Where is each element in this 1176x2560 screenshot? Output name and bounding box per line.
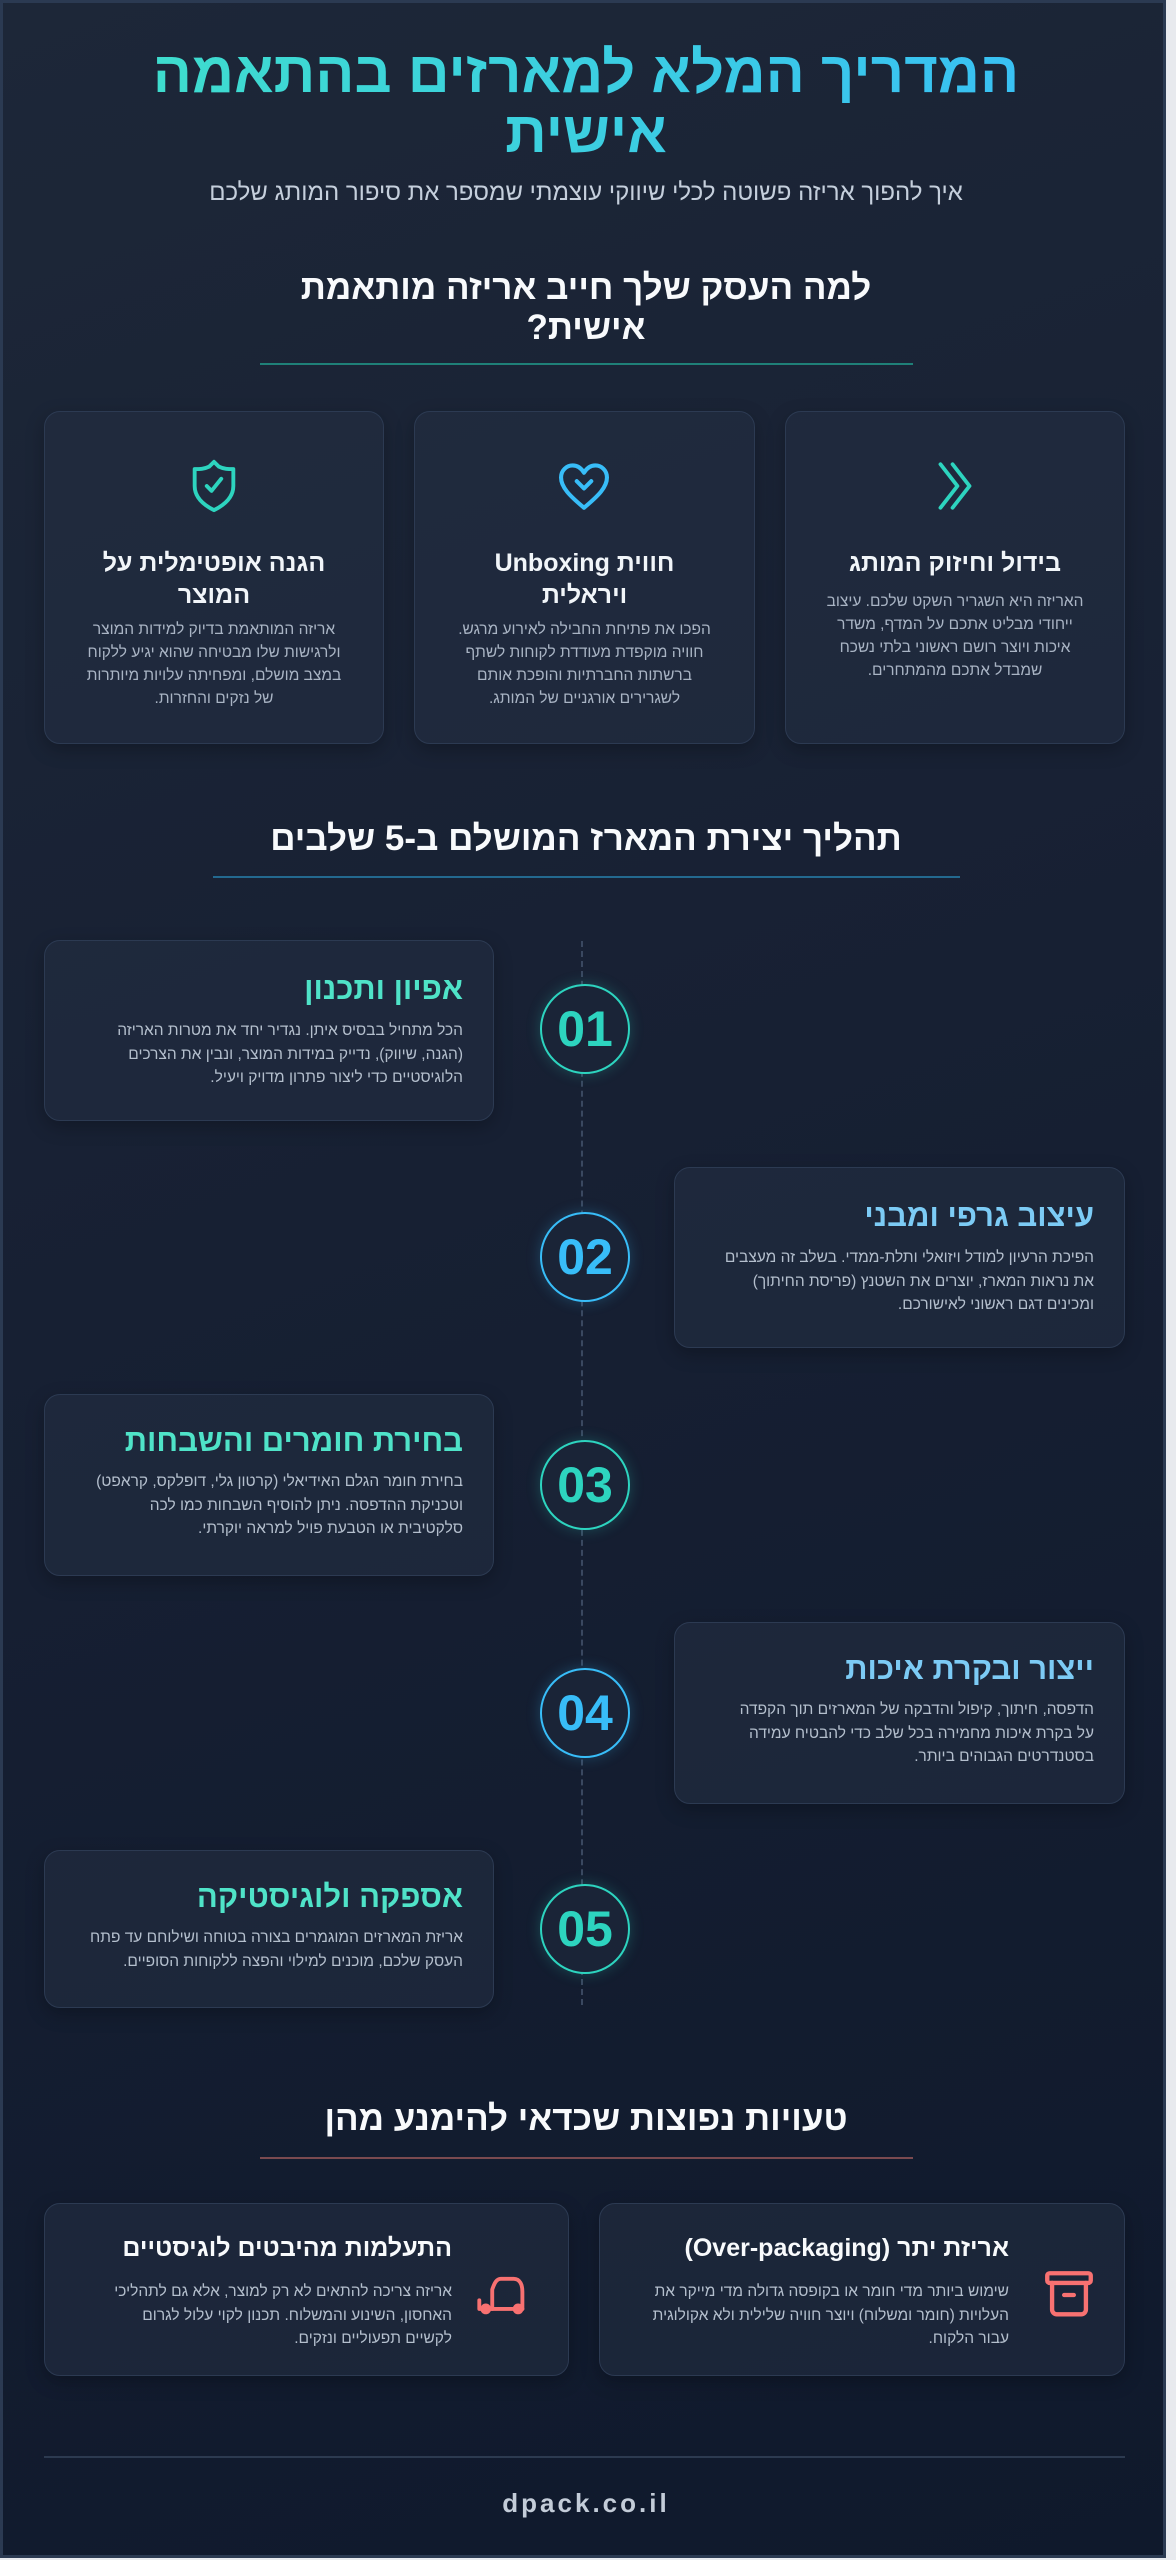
panel: protection: המוצר	[178, 581, 250, 609]
title	[43, 43, 1129, 163]
panel: differentiation: האריזה היא השגריר השקט שלכם. עיצוב	[827, 593, 1083, 610]
step 1: הכל מתחיל בבסיס איתן. נגדיר יחד את מטרות האריזה	[117, 1022, 463, 1039]
step number 01: 01	[557, 1001, 613, 1057]
step 1: אפיון ותכנון	[304, 971, 463, 1006]
title: המדריך המלא למארזים בהתאמה	[153, 40, 1019, 105]
step 3: בחירת חומרים והשבחות	[125, 1423, 463, 1458]
panel: differentiation: איכות ויוצר רושם ראשוני בלתי נשכח	[840, 639, 1070, 656]
step 2: הפיכת הרעיון למודל ויזואלי ותלת-ממדי. בשלב זה מעצבים	[725, 1249, 1094, 1266]
step number 04: 04	[557, 1685, 613, 1741]
step 5: העסק שלכם, מוכנים למילוי והפצה ללקוחות הסופיים.	[123, 1952, 463, 1970]
panel: protection: של נזקים והחזרות.	[155, 690, 273, 707]
step 5: אספקה ולוגיסטיקה	[197, 1879, 463, 1914]
panel: over-packaging: העלויות (חומר ומשלוח) ויוצר חוויה שלילית ולא אקולוגית	[653, 2306, 1009, 2324]
step number 02: 02	[557, 1229, 613, 1285]
step 4: על בקרת איכות מחמירה בכל שלב כדי להבטיח עמידה	[749, 1724, 1094, 1742]
heading: process: תהליך יצירת המארז המושלם ב-5 שלבים	[270, 819, 902, 858]
step 5: אריזת המארזים המוגמרים בצורה בטוחה ושילוחם עד פתח	[90, 1929, 463, 1946]
step number 02	[540, 1212, 630, 1302]
panel: over-packaging: שימוש ביותר מדי חומר או בקופסה גדולה מדי מייקר את	[655, 2283, 1009, 2300]
panel: unboxing	[414, 411, 755, 744]
heading: why: למה העסק שלך חייב אריזה מותאמת	[301, 268, 871, 307]
step number 03	[540, 1440, 630, 1530]
step number 03: 03	[557, 1457, 613, 1513]
panel: unboxing: חוויה מוקפדת מעודדת לקוחות לשתף	[465, 644, 704, 661]
step 2: ומכינים דגם ראשוני לאישורכם.	[898, 1296, 1094, 1313]
panel: protection: במצב מושלם, ומפחיתה עלויות מיותרות	[87, 667, 341, 684]
step 5	[44, 1850, 494, 2008]
step 4: בסטנדרטים הגבוהים ביותר.	[914, 1748, 1094, 1765]
panel: unboxing: ברשתות החברתיות והופכת אותם	[477, 667, 692, 684]
step number 05	[540, 1884, 630, 1974]
panel: logistics: אריזה צריכה להתאים לא רק למוצר, אלא גם לתהליכי	[114, 2283, 452, 2300]
step number 05: 05	[557, 1901, 613, 1957]
panel: protection: הגנה אופטימלית על	[103, 549, 325, 577]
icon: truck	[477, 2276, 524, 2314]
step 3: בחירת חומר הגלם האידיאלי (קרטון גלי, דופלקס, קראפט)	[96, 1473, 463, 1490]
step 2	[674, 1167, 1125, 1348]
heading: why: אישית?	[526, 308, 645, 347]
panel: logistics	[44, 2203, 569, 2376]
icon: double chevron	[938, 462, 972, 510]
step 4	[674, 1622, 1125, 1804]
heading: mistakes: טעויות נפוצות שכדאי להימנע מהן	[324, 2099, 848, 2138]
step 1	[44, 940, 494, 1121]
step number 01	[540, 984, 630, 1074]
step 2: את נראות המארז, יוצרים את השטנץ (פריסת החיתוך)	[753, 1272, 1094, 1290]
panel: unboxing: ויראלית	[542, 581, 627, 609]
panel: differentiation: בידול וחיזוק המותג	[849, 549, 1061, 577]
panel: over-packaging: אריזת יתר (Over-packaging)	[685, 2234, 1009, 2262]
panel: unboxing: הפכו את פתיחת החבילה לאירוע מרגש.	[458, 621, 711, 638]
step 1: (הגנה, שיווק), נדייק במידות המוצר, ונבין את הצרכים	[128, 1046, 463, 1062]
step 2: עיצוב גרפי ומבני	[864, 1198, 1094, 1233]
step number 04	[540, 1668, 630, 1758]
panel: logistics: התעלמות מהיבטים לוגיסטיים	[122, 2234, 452, 2262]
step 3: וטכניקת ההדפסה. ניתן להוסיף השבחות כמו לכה	[150, 1496, 463, 1514]
panel: over-packaging	[599, 2203, 1125, 2376]
step 4: הדפסה, חיתוך, קיפול והדבקה של המארזים תוך הקפדה	[740, 1701, 1094, 1718]
icon: shield	[192, 460, 236, 512]
panel: protection: ולרגישות שלו מבטיחה שהוא יגיע ללקוח	[88, 644, 340, 661]
icon: box	[1045, 2271, 1093, 2316]
step 1: הלוגיסטיים כדי ליצור פתרון מדויק ויעיל.	[210, 1069, 463, 1086]
timeline dashed line	[581, 941, 583, 2005]
panel: protection	[44, 411, 384, 744]
subtitle: איך להפוך אריזה פשוטה לכלי שיווקי עוצמתי שמספר את סיפור המותג שלכם	[209, 179, 963, 206]
panel: unboxing: חווית Unboxing	[495, 549, 674, 577]
footer: website: dpack.co.il	[502, 2488, 670, 2518]
panel: over-packaging: עבור הלקוח.	[929, 2330, 1009, 2347]
panel: logistics: האחסון, השינוע והמשלוח. תכנון לקוי עלול לגרום	[142, 2306, 452, 2324]
step 4: ייצור ובקרת איכות	[845, 1651, 1094, 1686]
panel: differentiation	[785, 411, 1125, 744]
panel: unboxing: לשגרירים אורגניים של המותג.	[489, 690, 680, 707]
title: אישית	[505, 100, 667, 165]
icon: heart	[559, 463, 609, 510]
panel: differentiation: שמבדל אתכם מהמתחרים.	[868, 662, 1042, 679]
panel: protection: אריזה המותאמת בדיוק למידות המוצר	[93, 621, 335, 638]
panel: logistics: לקשיים תפעוליים ונזקים.	[294, 2330, 452, 2347]
step 3	[44, 1394, 494, 1576]
heading: why	[301, 268, 871, 347]
step 3: סלקטיבית או הטבעת פויל למראה יוקרתי.	[198, 1520, 463, 1537]
panel: differentiation: ייחודי מבליט אתכם על המדף, משדר	[837, 616, 1073, 633]
